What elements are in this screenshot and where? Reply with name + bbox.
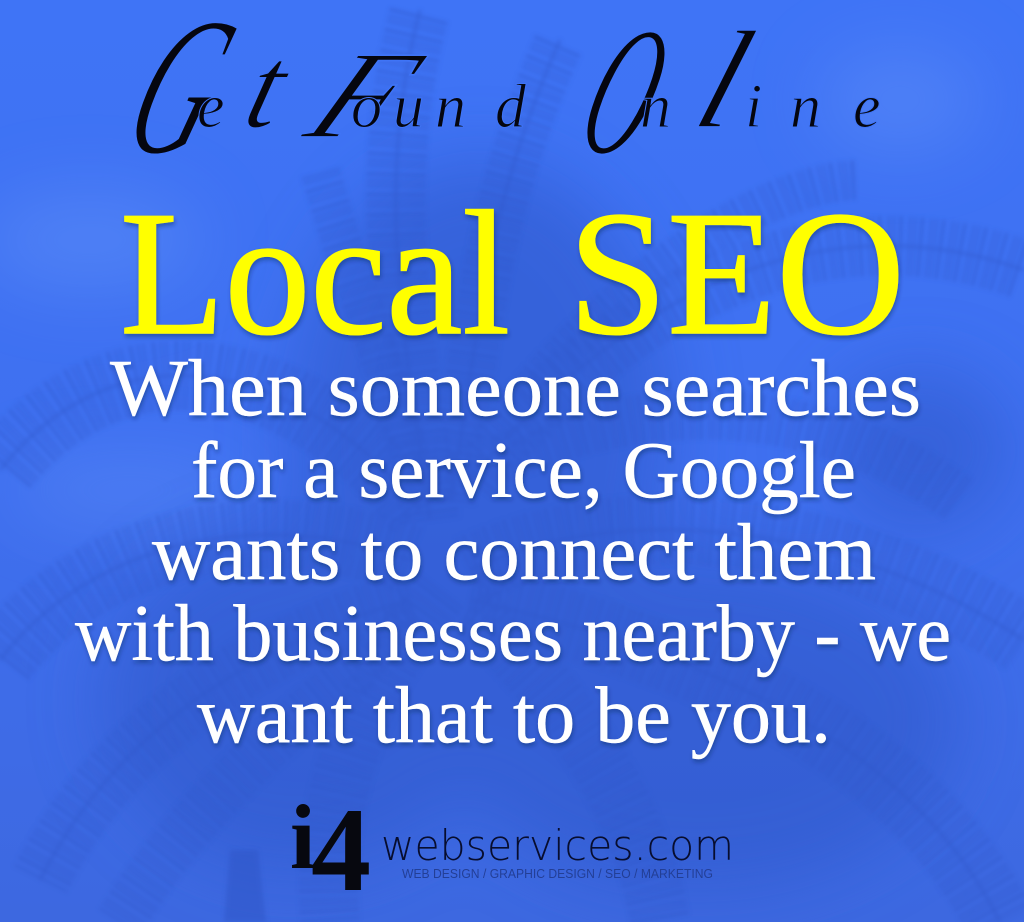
heading: Local SEO: Local	[120, 174, 510, 372]
body text: local search message: want that to be you.	[197, 670, 831, 760]
background: clouds	[0, 50, 980, 520]
logo: i4 webservices.com	[290, 783, 734, 916]
script title: Get Found Online: F	[284, 27, 444, 165]
heading: Local SEO: SEO	[568, 174, 905, 372]
script title: Get Found Online	[102, 0, 881, 197]
script title: Get Found Online: l	[680, 3, 769, 158]
script title: Get Found Online: i	[745, 73, 762, 141]
script title: Get Found Online: e	[197, 73, 225, 141]
logo mark: i4: 4	[311, 783, 371, 916]
logo mark: i4: i	[290, 786, 316, 888]
body text: local search message: for a service, Google	[191, 425, 856, 515]
body text: local search message: wants to connect them	[152, 507, 876, 597]
heading: Local SEO	[120, 174, 905, 372]
script title: Get Found Online: ne	[790, 73, 881, 141]
script title: Get Found Online: ound	[351, 73, 527, 141]
background: dark foliage masses	[100, 160, 1010, 890]
body text: local search message: When someone searches	[110, 343, 921, 433]
logo wordmark: webservices.com	[381, 821, 734, 870]
script title: Get Found Online: t	[233, 22, 304, 153]
script title: Get Found Online: n	[640, 73, 671, 141]
logo tagline: WEB DESIGN / GRAPHIC DESIGN / SEO / MARKETING	[402, 866, 713, 881]
body text: local search message	[75, 343, 951, 760]
body text: local search message: with businesses nearby - we	[75, 588, 951, 678]
